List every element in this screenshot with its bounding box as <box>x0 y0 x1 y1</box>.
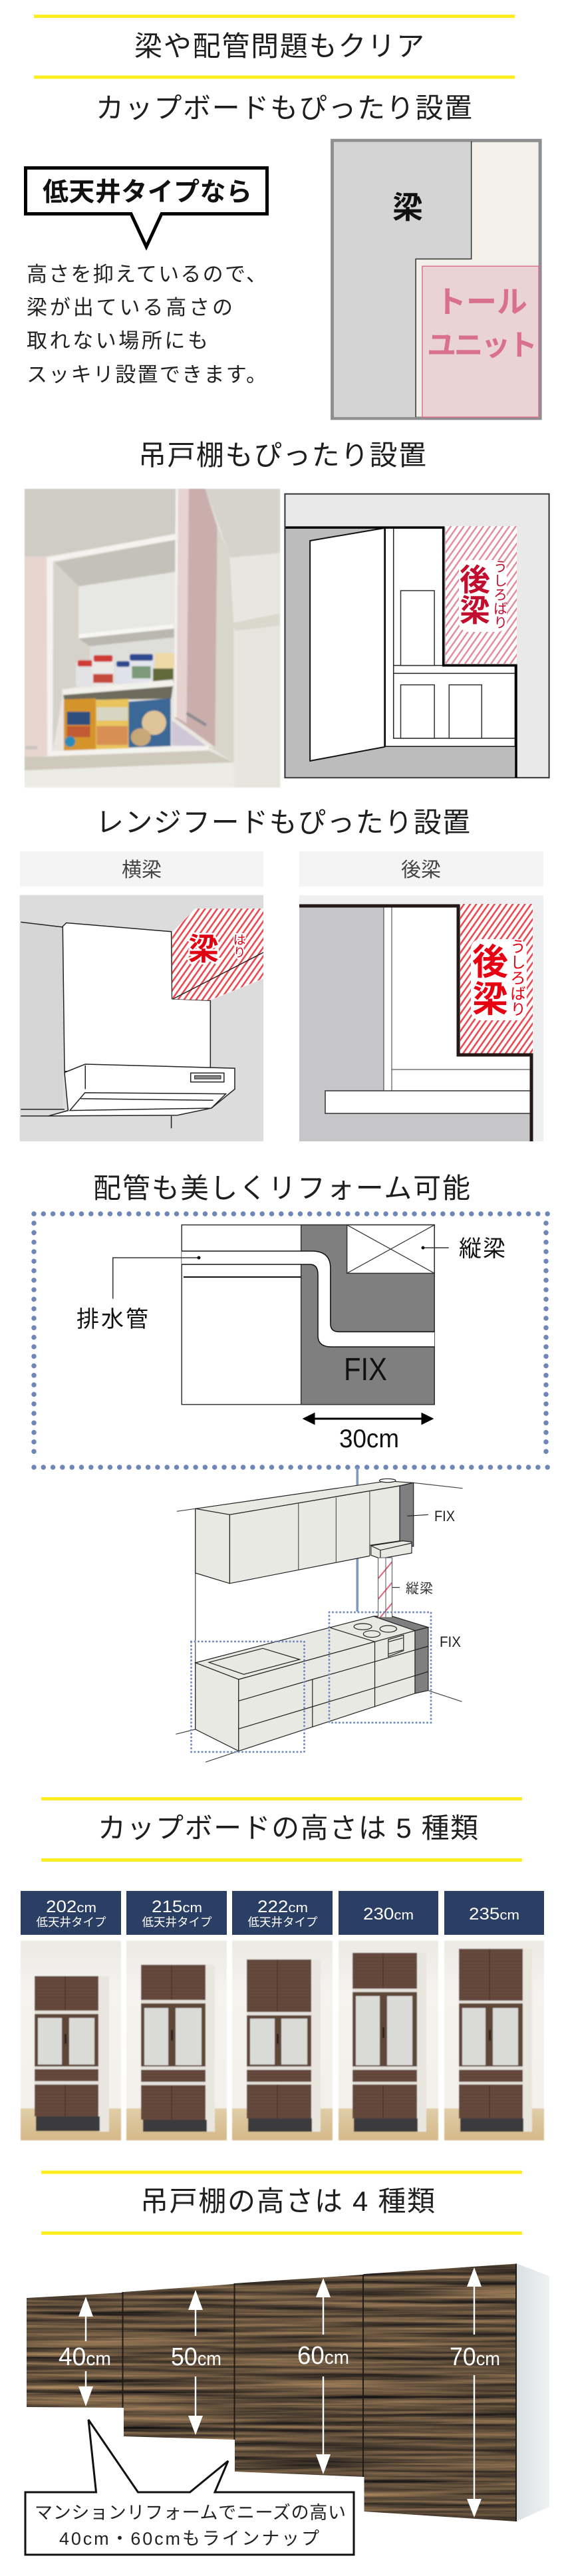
header: 215cm: 215cm <box>152 1898 202 1916</box>
heading: wall cabinet heights <box>41 2171 522 2235</box>
label: 60cm: 60cm <box>297 2342 349 2370</box>
text block: description: 取れない場所にも <box>27 329 208 353</box>
diagram: beam and tall unit: ユニット <box>427 329 537 362</box>
diagram: beam and tall unit <box>333 140 540 418</box>
open door <box>175 489 217 747</box>
callout: mansion reform: 40cm・60cmもラインナップ <box>59 2529 319 2549</box>
label bar: side beam: 横梁 <box>122 859 162 881</box>
callout: low ceiling type: 低天井タイプなら <box>43 178 252 207</box>
callout: low ceiling type <box>25 168 267 247</box>
header: 230cm: 230cm <box>363 1905 414 1924</box>
label: 50cm: 50cm <box>171 2343 221 2371</box>
hatch: rear beam <box>446 526 517 664</box>
heading: piping: 配管も美しくリフォーム可能 <box>93 1173 470 1204</box>
photo: open wall cabinet <box>25 489 281 787</box>
text block: description: スッキリ設置できます。 <box>27 363 267 386</box>
cereal boxes <box>64 698 206 750</box>
header: 202cm: 202cm <box>46 1898 96 1916</box>
diagram: beam and tall unit: 梁 <box>392 190 423 225</box>
label: vertical beam: 縦梁 <box>406 1581 433 1596</box>
header: 222cm <box>232 1891 333 1935</box>
heading: range hood fits: レンジフードもぴったり設置 <box>96 807 470 838</box>
arrow: 30cm span <box>305 1414 432 1423</box>
header: 235cm: 235cm <box>469 1905 519 1924</box>
arrow: 50cm <box>188 2290 203 2435</box>
diagram: rear beam wall cabinet: 梁 <box>460 593 490 628</box>
photo: cupboard 230cm <box>339 1941 438 2140</box>
hatch: rear beam <box>460 904 533 1054</box>
diagram: range hood with rear beam: 後 <box>472 942 508 982</box>
diagram: range hood with rear beam: うしろばり <box>508 938 525 1016</box>
diagram: range hood with rear beam <box>299 895 543 1141</box>
heading: cupboard heights: カップボードの高さは 5 種類 <box>98 1812 478 1844</box>
photo: cupboard 235cm <box>444 1941 544 2140</box>
text block: description: 梁が出ている高さの <box>27 296 233 319</box>
label: FIX: FIX <box>344 1352 387 1387</box>
illustration: kitchen isometric <box>176 1479 463 1762</box>
header: 202cm <box>21 1891 121 1935</box>
arrow: 40cm <box>78 2297 93 2406</box>
callout: mansion reform: マンションリフォームでニーズの高い <box>35 2503 346 2523</box>
heading: wall cabinet heights: 吊戸棚の高さは 4 種類 <box>140 2186 435 2217</box>
label: 70cm: 70cm <box>450 2343 500 2371</box>
label: FIX lower: FIX <box>440 1634 461 1650</box>
column: vertical beam <box>378 1558 392 1618</box>
photo: cupboard 202cm <box>21 1941 121 2140</box>
diagram: range hood with rear beam: 梁 <box>472 980 508 1020</box>
label bar: rear beam: 後梁 <box>401 859 441 881</box>
heading: cupboard fits: カップボードもぴったり設置 <box>96 92 472 124</box>
label: vertical beam: 縦梁 <box>459 1236 505 1262</box>
header: 222cm: 222cm <box>257 1898 308 1916</box>
arrow: 60cm <box>316 2278 331 2474</box>
label bar: side beam <box>20 851 263 887</box>
jars on shelf <box>76 653 174 687</box>
header: 202cm: 低天井タイプ <box>36 1916 106 1929</box>
label: drain pipe: 排水管 <box>76 1307 148 1332</box>
header: 235cm <box>444 1891 544 1935</box>
illustration: four wall cabinets <box>27 2261 549 2524</box>
heading: main title block <box>34 15 515 78</box>
diagram: rear beam wall cabinet: うしろばり <box>492 559 507 629</box>
diagram: rear beam wall cabinet <box>285 494 549 778</box>
plan drawing <box>113 1225 449 1405</box>
title: 梁や配管問題もクリア <box>134 31 424 62</box>
header: 230cm <box>339 1891 438 1935</box>
label: 40cm: 40cm <box>59 2343 111 2371</box>
dotted outline: left module <box>192 1642 305 1752</box>
connector line <box>356 1467 358 1612</box>
wood fronts <box>27 2261 516 2524</box>
diagram: rear beam wall cabinet: 後 <box>460 563 490 597</box>
diagram: beam and tall unit: トール <box>436 285 527 319</box>
header: 222cm: 低天井タイプ <box>247 1916 318 1929</box>
cabinet side <box>516 2263 549 2521</box>
header: 215cm: 低天井タイプ <box>142 1916 212 1929</box>
heading: cupboard heights <box>41 1797 522 1862</box>
text block: description: 高さを抑えているので、 <box>27 263 267 286</box>
photo: cupboard 215cm <box>126 1941 227 2140</box>
diagram: range hood with side beam: 梁 <box>188 932 219 966</box>
dotted outline: right module <box>329 1612 431 1723</box>
text block: description <box>27 263 267 386</box>
diagram: range hood with side beam <box>20 895 263 1141</box>
label: FIX upper: FIX <box>434 1508 455 1524</box>
photo: cupboard 222cm <box>232 1941 333 2140</box>
panel: piping plan in dotted frame <box>34 1214 549 1467</box>
heading: wall cabinet fits: 吊戸棚もぴったり設置 <box>138 440 426 471</box>
header: 215cm <box>126 1891 227 1935</box>
arrow: 70cm <box>467 2267 482 2517</box>
label bar: rear beam <box>299 851 543 887</box>
hatch: side beam <box>172 909 263 1000</box>
callout: mansion reform <box>25 2420 354 2555</box>
label: 30cm: 30cm <box>339 1425 399 1453</box>
diagram: range hood with side beam: はり <box>231 933 245 958</box>
